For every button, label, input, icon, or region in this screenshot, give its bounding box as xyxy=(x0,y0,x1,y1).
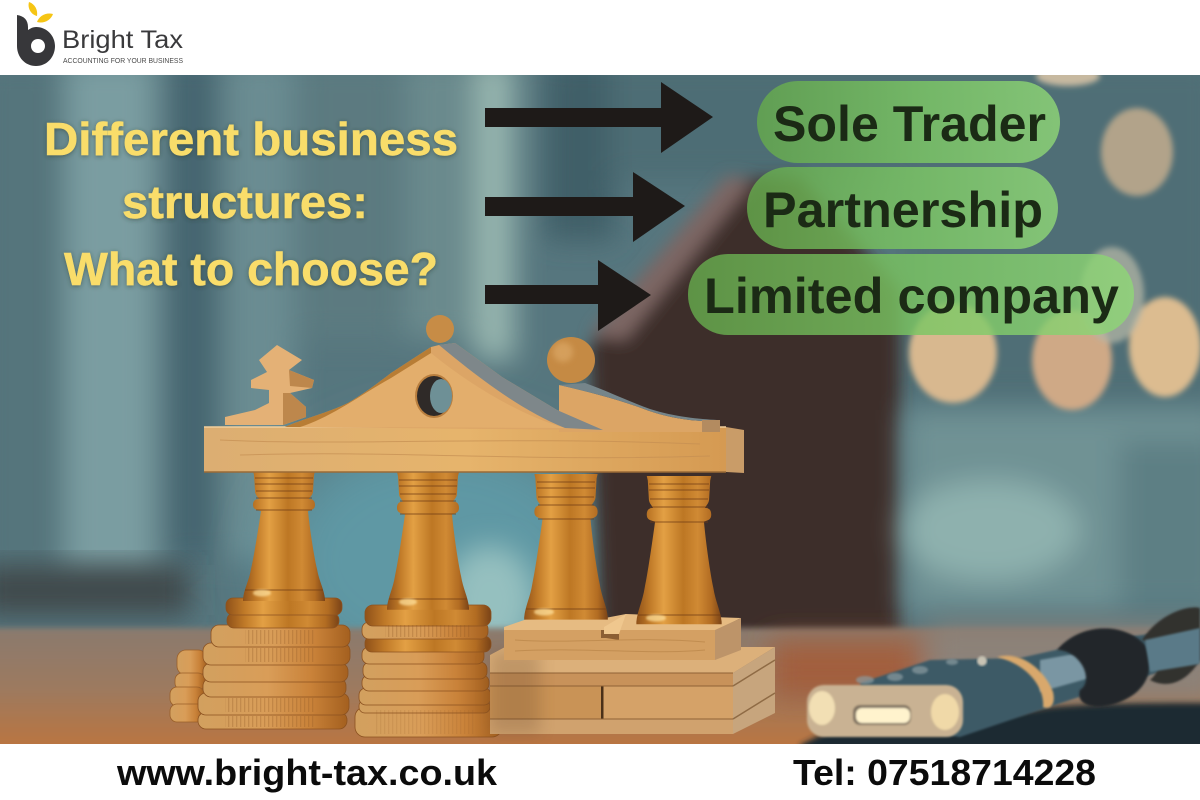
silver stud xyxy=(977,656,987,666)
photo: wooden balls xyxy=(426,315,595,383)
photo: wooden block base xyxy=(490,647,775,734)
rubber rings xyxy=(1057,628,1150,707)
column 4 xyxy=(636,476,722,624)
logo tagline: ACCOUNTING FOR YOUR BUSINESS xyxy=(63,58,183,65)
photo: middle coin stack xyxy=(355,605,502,737)
arrows xyxy=(485,82,713,331)
column 1 xyxy=(243,471,325,601)
logo wordmark: Bright Tax xyxy=(62,26,184,54)
arrow to Limited company xyxy=(485,260,651,331)
arrow to Sole Trader xyxy=(485,82,713,153)
footer telephone: Tel: 07518714228 xyxy=(793,752,1096,793)
light end cap xyxy=(807,685,963,737)
dark mat xyxy=(800,703,1200,750)
table surface xyxy=(0,628,1200,758)
pill: Sole Trader: Sole Trader xyxy=(773,96,1046,152)
teal behind columns xyxy=(308,472,600,630)
heading xyxy=(44,113,458,295)
heading line 3: What to choose? xyxy=(64,243,438,295)
column 3 xyxy=(524,474,608,620)
right table tones xyxy=(770,625,1200,700)
tan ring xyxy=(997,656,1054,708)
left dark band xyxy=(0,565,190,615)
pill: Limited company: Limited company xyxy=(704,268,1119,324)
photo: small back coin stack xyxy=(170,650,207,722)
photo: right roof piece xyxy=(559,383,720,432)
footer website: www.bright-tax.co.uk xyxy=(116,752,498,793)
photo: foreground device xyxy=(800,607,1200,750)
photo: wooden plinth block xyxy=(504,614,741,660)
photo: gold columns xyxy=(243,471,722,624)
right teal area xyxy=(900,410,1200,610)
roof ball xyxy=(426,315,454,343)
photo: small wooden finial xyxy=(225,345,314,425)
header logo: Bright Tax xyxy=(17,2,184,66)
pill: Partnership: Partnership xyxy=(763,182,1043,238)
right ball xyxy=(547,337,595,383)
pill: Limited company xyxy=(688,254,1134,335)
pill: Partnership xyxy=(747,167,1058,249)
photo: left coin stack xyxy=(198,598,350,729)
heading line 2: structures: xyxy=(122,176,368,228)
photo: wooden beam xyxy=(204,427,744,473)
arrow to Partnership xyxy=(485,172,685,242)
column 2 xyxy=(387,472,469,610)
house silhouette xyxy=(590,175,900,640)
device body xyxy=(859,634,1158,738)
pill: Sole Trader xyxy=(757,81,1060,163)
photo: main wooden roof xyxy=(285,343,603,430)
heading line 1: Different business xyxy=(44,113,458,165)
icon: yellow leaves xyxy=(29,2,53,23)
roof round hole xyxy=(415,374,453,418)
option pills xyxy=(688,81,1134,335)
column ring details xyxy=(245,478,720,615)
bokeh lights xyxy=(909,66,1200,410)
icon: letter b xyxy=(17,15,55,66)
keypad dots xyxy=(856,659,958,684)
